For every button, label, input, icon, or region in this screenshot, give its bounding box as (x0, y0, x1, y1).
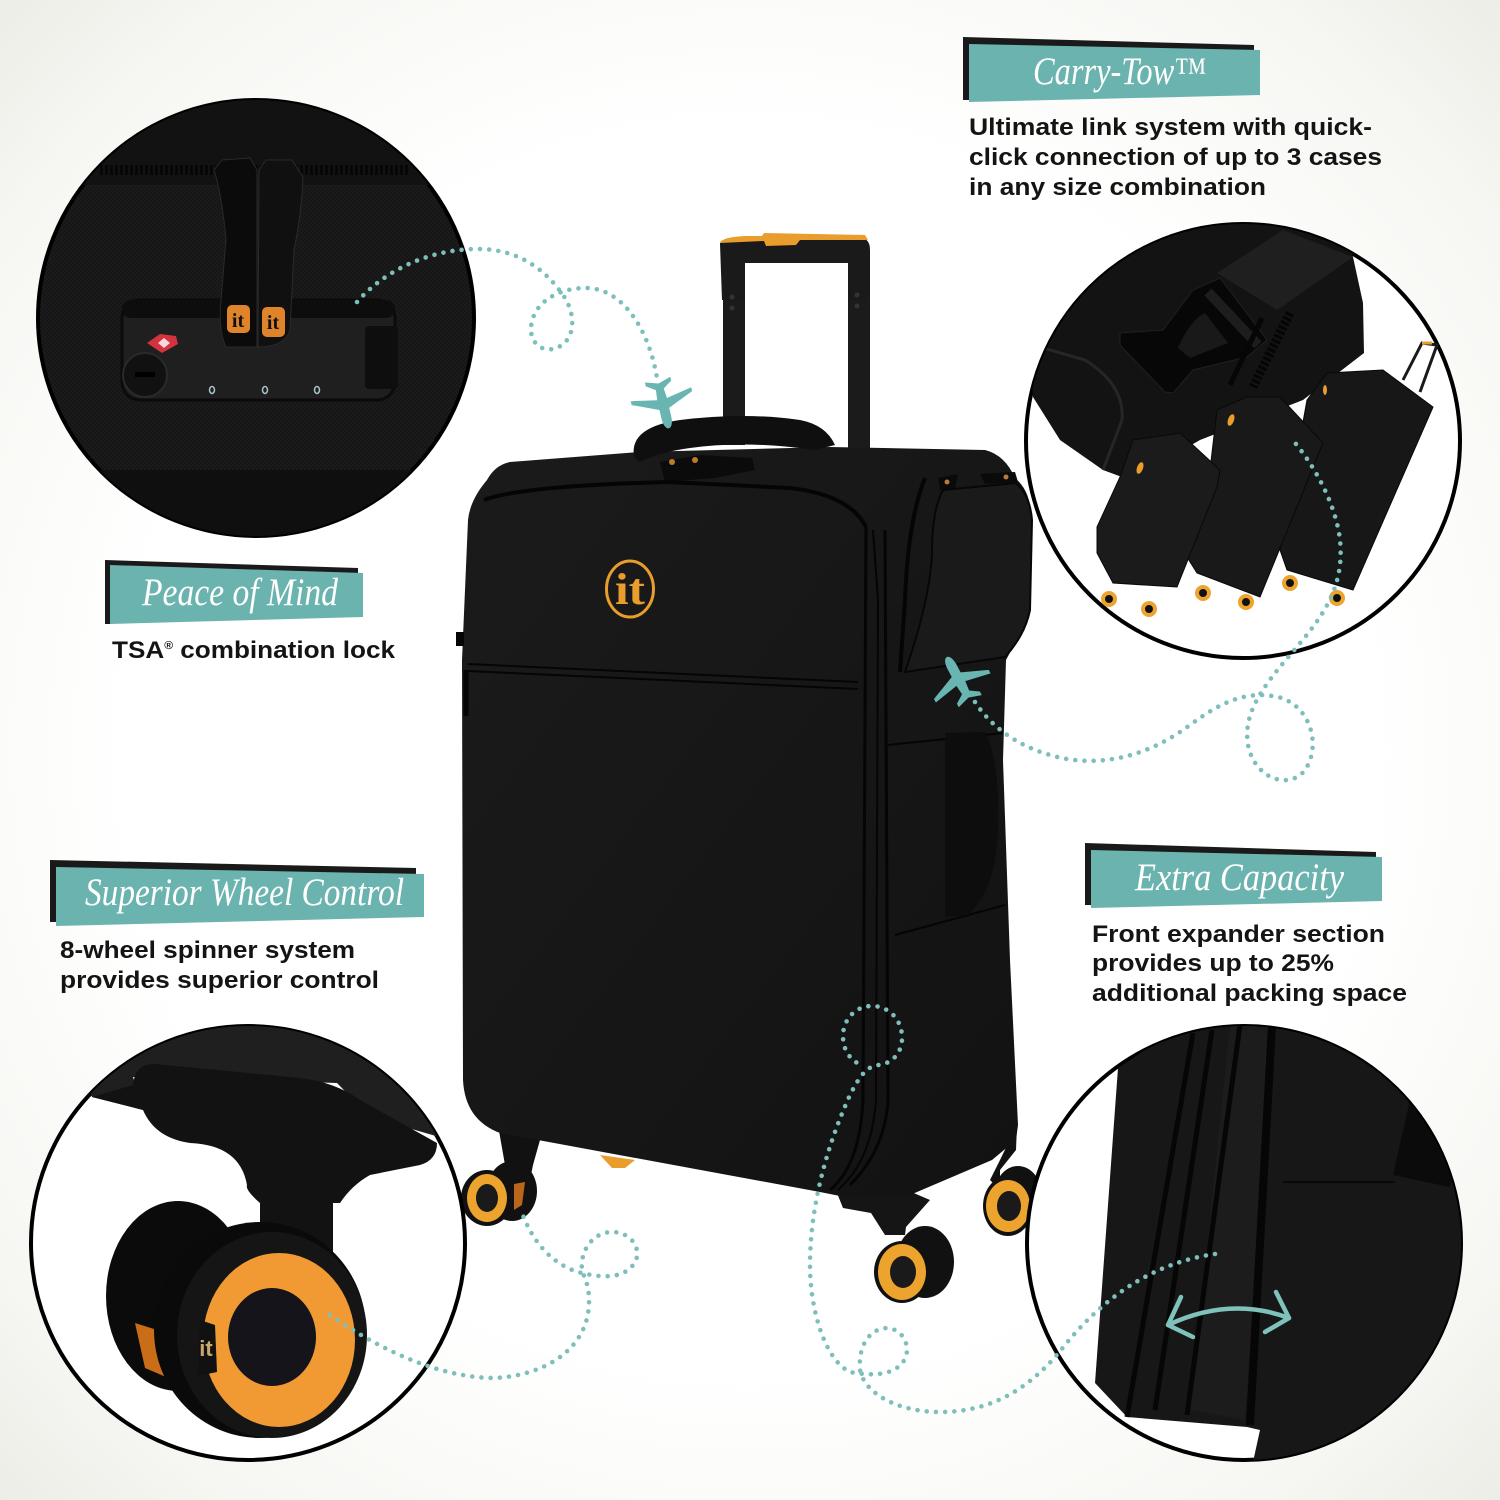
wheel bracket (92, 1064, 437, 1260)
front expander pocket (900, 472, 1032, 672)
panel: wheel detail (31, 1020, 465, 1460)
zipper seams and panel lines (460, 482, 1005, 1190)
description (969, 114, 1382, 201)
padded panel rim (1046, 348, 1124, 470)
callout: superior wheel control (50, 860, 424, 994)
description: provides superior control (60, 967, 379, 994)
dotted route: lock (357, 249, 657, 378)
dotted route: expander (810, 1006, 1215, 1412)
panel: carry-tow detail (1020, 220, 1460, 658)
description: Front expander section (1092, 921, 1385, 948)
expander fabric (1095, 1020, 1470, 1462)
it mark: it (199, 1336, 213, 1361)
side seam (1283, 1181, 1395, 1183)
banner (105, 560, 363, 624)
telescopic trolley handle (720, 233, 870, 450)
dotted route: carry-tow (975, 437, 1341, 780)
front wheel tyre (154, 1222, 366, 1438)
it logo: it (615, 565, 645, 614)
side handle base (1393, 1104, 1451, 1187)
description: click connection of up to 3 cases (969, 144, 1382, 171)
heading: Extra Capacity (1134, 856, 1345, 899)
description (1092, 921, 1407, 1007)
description: in any size combination (969, 174, 1266, 201)
description: 8-wheel spinner system (60, 937, 355, 964)
it logo (606, 561, 654, 617)
description (60, 937, 379, 994)
lock body (122, 300, 395, 400)
side handle (945, 732, 998, 917)
fabric band (84, 100, 428, 185)
keyhole (123, 353, 167, 397)
suitcase body (462, 447, 1031, 1197)
panel: expander detail (1027, 1020, 1470, 1462)
carry handle (634, 416, 835, 462)
dial markers (210, 386, 320, 394)
callout: peace of mind (105, 560, 396, 664)
zipper track (1253, 313, 1290, 387)
panel: combination lock detail (30, 100, 480, 540)
zipper pulls: it (232, 310, 244, 332)
callout: extra capacity (1085, 843, 1407, 1007)
banner (963, 37, 1260, 102)
zipper (100, 165, 410, 175)
orange hub ring (203, 1253, 355, 1427)
callout: carry-tow (963, 37, 1382, 201)
strap close-up (1020, 220, 1364, 480)
top zipper lock (660, 455, 755, 482)
description: ® (164, 640, 173, 652)
three linked cases (1097, 343, 1437, 615)
buckle (1120, 278, 1267, 393)
zipper lines (1127, 1025, 1272, 1425)
dotted route: wheel (330, 1210, 637, 1378)
fabric (90, 1026, 437, 1136)
heading: Carry-Tow™ (1033, 50, 1206, 93)
wheel cap (228, 1288, 316, 1386)
description: additional packing space (1092, 980, 1407, 1007)
zipper pulls: it (267, 312, 279, 334)
description: provides up to 25% (1092, 950, 1334, 977)
wheel assemblies (461, 1125, 1042, 1303)
banner (50, 860, 424, 926)
description: Ultimate link system with quick- (969, 114, 1372, 141)
slide button (365, 326, 398, 389)
description: TSA (112, 637, 160, 664)
TSA diamond (147, 334, 178, 353)
description: combination lock (173, 637, 396, 664)
banner (1085, 843, 1382, 908)
zipper pulls (214, 158, 303, 347)
rear wheel (106, 1201, 228, 1391)
suitcase (460, 233, 1042, 1303)
heading: Peace of Mind (141, 571, 338, 614)
heading: Superior Wheel Control (85, 871, 404, 914)
icon: plane to carry-tow (919, 642, 998, 716)
arrow: expansion (1168, 1292, 1289, 1337)
webbing strap (1217, 230, 1353, 310)
icon: plane to lock (627, 373, 699, 435)
expander gusset (1190, 1025, 1272, 1420)
